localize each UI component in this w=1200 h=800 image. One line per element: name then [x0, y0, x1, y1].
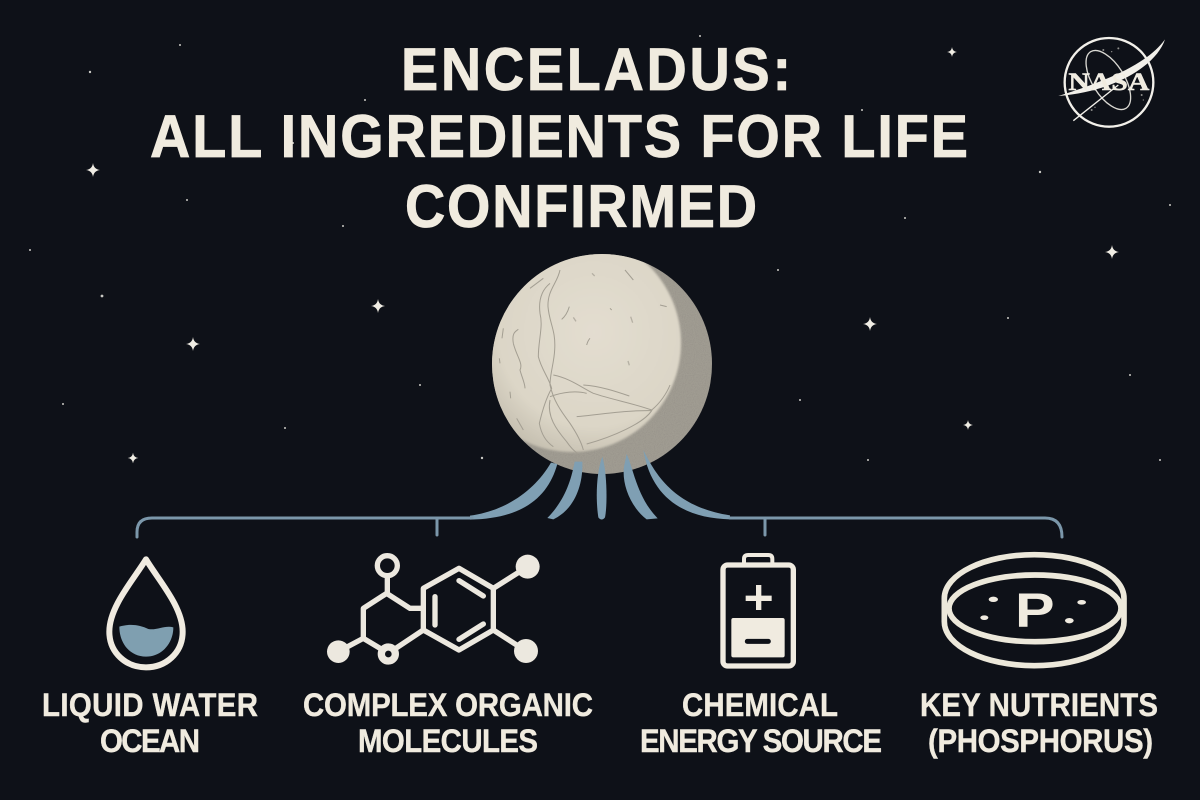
- moon shaded disc: [492, 254, 712, 474]
- title: ALL INGREDIENTS FOR LIFE: [150, 104, 968, 170]
- icon: battery: [723, 555, 793, 666]
- label: chemical energy source: [640, 687, 882, 759]
- icon: petri dish with phosphorus: P: [1015, 583, 1055, 637]
- label: key nutrients phosphorus: [920, 687, 1158, 759]
- label: key nutrients phosphorus: (PHOSPHORUS): [928, 723, 1153, 759]
- label: liquid water ocean: [42, 687, 258, 759]
- icon: water drop: [109, 559, 183, 667]
- moon lit side: [492, 254, 682, 453]
- plumes: [470, 450, 730, 520]
- moon: Enceladus: [492, 254, 712, 474]
- label: liquid water ocean: LIQUID WATER: [42, 687, 258, 723]
- label: complex organic molecules: [303, 687, 593, 759]
- label: chemical energy source: CHEMICAL: [682, 687, 838, 723]
- label: key nutrients phosphorus: KEY NUTRIENTS: [920, 687, 1158, 723]
- label: chemical energy source: ENERGY SOURCE: [640, 723, 882, 759]
- icon: organic molecule: [327, 555, 540, 663]
- title: [150, 37, 968, 240]
- icon: NASA logo: [1058, 38, 1165, 127]
- moon surface cracks: [499, 270, 670, 454]
- title: ENCELADUS:: [401, 37, 791, 103]
- starfield: [29, 35, 1171, 463]
- title: CONFIRMED: [405, 174, 757, 240]
- icon: petri dish with phosphorus: [944, 555, 1124, 666]
- label: complex organic molecules: MOLECULES: [358, 723, 538, 759]
- connector lines: [137, 518, 1062, 537]
- label: liquid water ocean: OCEAN: [100, 723, 200, 759]
- label: complex organic molecules: COMPLEX ORGANIC: [303, 687, 593, 723]
- icon: NASA logo: NASA: [1068, 68, 1150, 96]
